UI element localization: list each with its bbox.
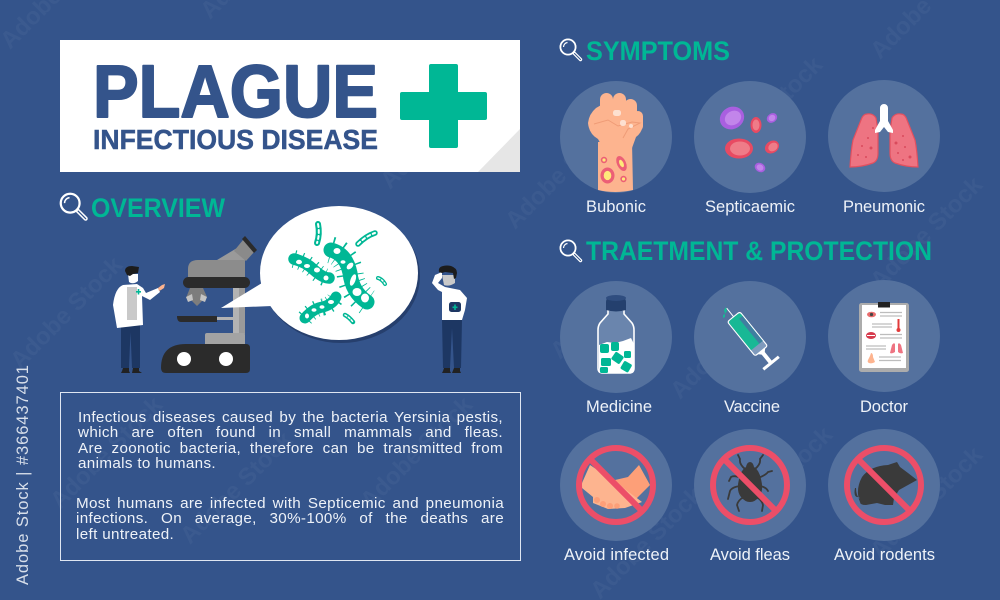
icon: prohibition sign — [579, 448, 653, 522]
watermark pattern: Adobe Stock — [865, 441, 988, 564]
item: septicaemic: Septicaemic — [705, 198, 795, 216]
watermark pattern: Adobe Stock — [45, 391, 168, 514]
watermark pattern: Adobe Stock — [865, 171, 988, 294]
title panel: PLAGUE — [93, 50, 378, 133]
watermark pattern: Adobe Stock — [500, 111, 623, 234]
item: pneumonic: Pneumonic — [843, 198, 925, 216]
figure: doctor pointing — [113, 266, 165, 373]
watermark pattern: Adobe Stock — [665, 281, 788, 404]
icon: rat — [854, 462, 917, 505]
item: avoid rodents — [828, 429, 940, 564]
bacterium: bottom — [305, 297, 336, 318]
icon: medical clipboard — [859, 302, 909, 372]
title panel — [60, 40, 520, 172]
watermark pattern: Adobe Stock — [705, 51, 828, 174]
icon: lungs — [850, 104, 918, 167]
bacterium: left — [294, 259, 329, 280]
item: vaccine — [694, 281, 806, 416]
item: medicine: Medicine — [586, 398, 652, 416]
item: bubonic: Bubonic — [586, 198, 646, 216]
bacteria: small — [317, 224, 385, 322]
paragraph 1: animals to humans. — [78, 455, 216, 472]
item: doctor: Doctor — [860, 398, 908, 416]
paragraph 2 — [76, 495, 504, 543]
watermark pattern: Adobe Stock — [715, 421, 838, 544]
stock image id: Adobe Stock | #366437401 — [14, 365, 32, 585]
icon: sores — [600, 154, 629, 184]
paragraph 2: Most humans are infected with Septicemic and pneumonia — [76, 495, 504, 512]
paragraph 1: which are often found in small mammals and fleas. — [78, 424, 503, 441]
item: avoid rodents: Avoid rodents — [834, 546, 935, 564]
watermark pattern: Adobe Stock — [5, 251, 128, 374]
illustration: microscope — [161, 236, 257, 373]
icon: pill bottle — [598, 295, 634, 373]
title panel: INFECTIOUS DISEASE — [93, 124, 378, 155]
paragraph 1: Infectious diseases caused by the bacteria Yersinia pestis, — [78, 409, 503, 426]
item: doctor — [828, 280, 940, 416]
item: avoid infected: Avoid infected — [564, 546, 669, 564]
heading: treatment and protection: TRAETMENT & PROTECTION — [586, 236, 932, 266]
figure: doctor with clipboard — [432, 266, 467, 373]
item: avoid fleas — [694, 429, 806, 564]
watermark pattern: Adobe Stock — [355, 391, 478, 514]
item: pneumonic — [828, 80, 940, 216]
item: avoid fleas: Avoid fleas — [710, 546, 790, 564]
watermark pattern: Adobe Stock — [375, 71, 498, 194]
heading: symptoms: SYMPTOMS — [586, 36, 730, 66]
paragraph 1 — [78, 409, 503, 472]
paragraph 2: left untreated. — [76, 526, 174, 543]
paragraph 2: infections. On average, 30%-100% of the deaths are — [76, 510, 504, 527]
heading: overview: OVERVIEW — [91, 193, 225, 223]
item: septicaemic — [694, 81, 806, 216]
icon: prohibition sign — [847, 448, 921, 522]
watermark pattern: Adobe Stock — [175, 426, 298, 549]
item: avoid infected — [560, 429, 672, 564]
overview text panel — [60, 392, 521, 561]
speech bubble with bacteria — [221, 206, 420, 343]
icon: syringe — [719, 302, 780, 370]
watermark pattern: Adobe — [545, 292, 617, 364]
icon: prohibition sign — [713, 448, 787, 522]
paragraph 1: Are zoonotic bacteria, therefore can be transmitted from — [78, 440, 503, 457]
item: vaccine: Vaccine — [724, 398, 780, 416]
icon: blood cells — [716, 102, 782, 174]
icon: handshake — [582, 465, 650, 509]
item: medicine — [560, 281, 672, 416]
item: bubonic — [560, 81, 672, 216]
icon: fist — [588, 93, 643, 192]
icon: tick — [728, 455, 772, 511]
bacterium: large — [331, 248, 369, 302]
